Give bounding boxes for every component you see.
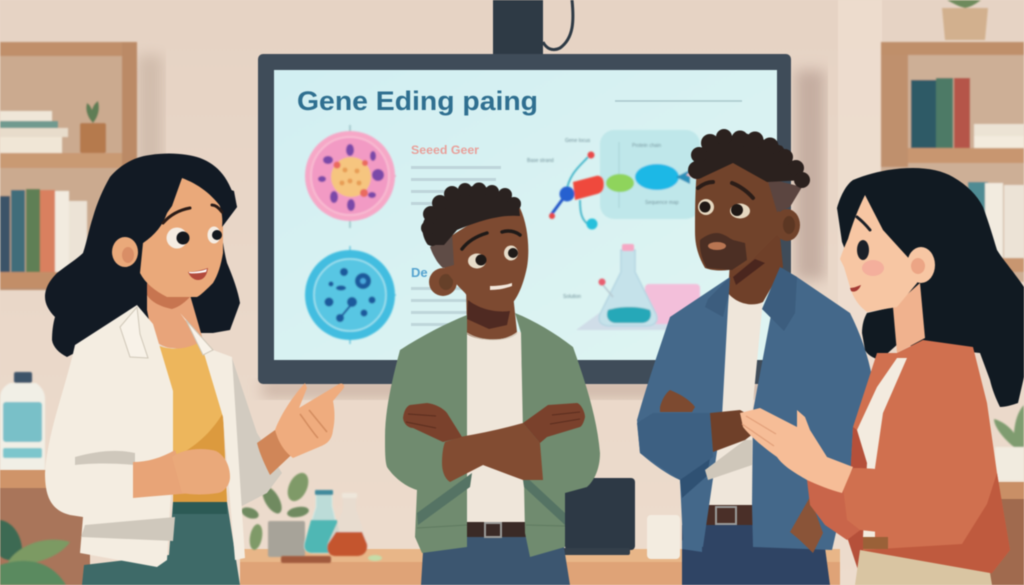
face (840, 195, 922, 312)
clasped hands (740, 408, 853, 493)
text block: upper (411, 145, 501, 205)
eyebrows (163, 205, 222, 223)
left hand (403, 403, 462, 442)
bookshelf: right (881, 42, 1024, 282)
diagram: blue cell (305, 246, 396, 344)
cabinet: left (0, 470, 90, 585)
hair (421, 182, 521, 246)
screen surface (274, 70, 777, 360)
wall mount and cable (493, 0, 573, 54)
eyebrow (857, 217, 870, 230)
sleeve (637, 413, 713, 480)
head (436, 208, 528, 310)
neck (728, 215, 783, 304)
diagram: molecule: Protein chain (632, 143, 661, 149)
diagram: molecule: Base strand (527, 158, 554, 164)
ear (774, 209, 800, 241)
neck (893, 283, 925, 353)
cardigan dark panel (847, 427, 867, 570)
forearm (710, 410, 766, 452)
side fade (430, 231, 454, 268)
screen (258, 54, 791, 384)
ear (429, 268, 457, 296)
crossed forearms (442, 423, 543, 482)
blue jacket right (752, 267, 872, 550)
belt (466, 522, 526, 537)
plant: top shelf (942, 0, 988, 40)
hidden hand (660, 390, 695, 412)
eyes (468, 246, 518, 268)
coat shadow (75, 451, 175, 541)
plant on desk (240, 470, 312, 557)
hair (688, 129, 810, 188)
eye (857, 240, 869, 260)
text block: lower (411, 265, 471, 326)
hair lower chunk (862, 307, 908, 360)
flasks on desk (281, 490, 382, 563)
eyes (698, 199, 750, 218)
cabinet: right (990, 482, 1024, 585)
laptop on desk (560, 478, 635, 555)
diagram: molecule: Sequence map (645, 200, 679, 206)
ear (907, 247, 935, 283)
eyebrows (698, 182, 753, 198)
eyes (166, 226, 222, 248)
left forearm (133, 450, 205, 498)
white tee (702, 294, 763, 508)
plant: bottom left (0, 520, 70, 585)
coat lapel (120, 307, 213, 358)
face (140, 178, 223, 297)
pants (82, 502, 240, 585)
coat left panel (45, 305, 173, 567)
hair fringe (135, 174, 182, 243)
coat right panel (180, 313, 245, 560)
collar (705, 267, 797, 331)
side fade (767, 178, 802, 212)
pocket hand (790, 497, 823, 553)
diagram: pink cell (305, 125, 396, 228)
belt (702, 505, 754, 525)
right hand (523, 403, 585, 443)
jeans (421, 535, 570, 585)
person: woman in white lab coat (45, 154, 344, 585)
person: man in green jacket (385, 182, 600, 585)
green jacket right (515, 313, 600, 557)
yellow shirt (153, 340, 227, 502)
screen title: Gene Eding paing (297, 86, 538, 116)
cardigan (847, 340, 1010, 580)
hair fringe (837, 193, 865, 228)
sleeve (843, 468, 977, 540)
cup on desk (647, 515, 680, 559)
bookshelf: left (0, 42, 137, 290)
text block: upper: Seeed Geer (411, 145, 480, 157)
lower sleeve (807, 480, 863, 540)
cardigan hem shadow (860, 473, 1010, 580)
neck (147, 287, 203, 349)
diagram: flask (563, 244, 700, 330)
neck (466, 285, 517, 340)
person: man in blue jacket (637, 129, 872, 585)
diagram: molecule (527, 130, 700, 230)
shirt shadow (705, 440, 752, 480)
mouth (188, 268, 208, 280)
ear (112, 237, 138, 267)
text block: lower: De (411, 265, 428, 280)
mouth (490, 283, 512, 290)
shirt (857, 358, 907, 538)
diagram: molecule: Gene locus (565, 138, 591, 144)
beard (700, 233, 747, 270)
cheek (862, 260, 884, 276)
desk (240, 549, 840, 585)
hair back (837, 168, 1024, 407)
person: woman in coral cardigan (740, 168, 1024, 585)
pointing hand (275, 383, 344, 458)
mouth (708, 242, 726, 250)
plant: right (994, 405, 1024, 481)
pants (855, 550, 992, 585)
blue jacket left (637, 277, 730, 547)
hair (45, 154, 240, 357)
right sleeve (225, 358, 282, 507)
bottle: left cabinet (0, 372, 45, 470)
right wrist (257, 430, 302, 475)
mouth (850, 285, 861, 292)
white tee (465, 332, 526, 524)
jeans (682, 525, 830, 585)
green jacket left (385, 315, 467, 553)
head (695, 159, 782, 270)
screen frame (258, 54, 791, 384)
diagram: flask: Solution (563, 294, 581, 300)
eyebrows (462, 231, 520, 249)
